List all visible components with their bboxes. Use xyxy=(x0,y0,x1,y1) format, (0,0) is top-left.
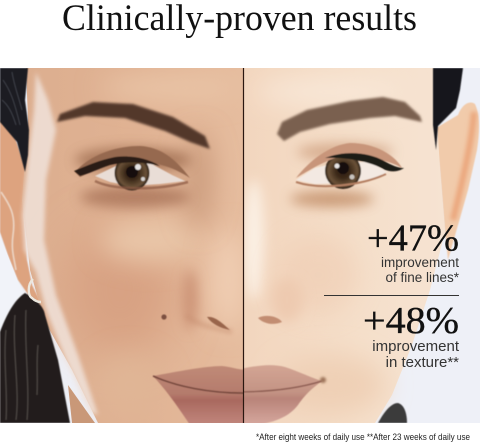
right undereye shadow xyxy=(290,191,374,207)
left undereye shadow xyxy=(80,186,190,208)
value 48: +48% xyxy=(363,300,459,342)
right nostril xyxy=(258,316,282,324)
right eye socket xyxy=(297,143,393,161)
stat: texture xyxy=(363,300,460,371)
earring xyxy=(29,279,41,302)
mole xyxy=(161,314,167,320)
right hair bottom xyxy=(378,403,407,423)
photo background xyxy=(0,68,480,423)
left eye socket xyxy=(75,147,191,173)
label texture: improvement xyxy=(372,338,460,355)
stat: fine lines xyxy=(367,218,460,285)
left lips xyxy=(154,366,243,423)
left face edge highlight xyxy=(22,72,98,415)
right half: after xyxy=(235,68,479,426)
left ear xyxy=(0,120,42,305)
label texture: in texture** xyxy=(386,354,459,371)
right eye xyxy=(296,143,404,189)
left eyebrow xyxy=(57,102,210,149)
left cheek warmth xyxy=(65,225,175,355)
left nose xyxy=(192,320,232,334)
neck xyxy=(68,385,95,423)
left half: before xyxy=(0,68,250,428)
before/after divider line xyxy=(242,68,244,423)
right lips xyxy=(244,364,320,423)
right ear xyxy=(436,102,479,260)
ponytail hair xyxy=(0,293,70,423)
label fine lines: of fine lines* xyxy=(385,270,460,285)
value 47: +47% xyxy=(367,218,459,260)
left background sliver xyxy=(6,250,16,277)
label fine lines: improvement xyxy=(381,255,459,270)
right eyebrow xyxy=(277,97,422,141)
right skin xyxy=(235,68,445,423)
left eye xyxy=(74,146,190,190)
left hair xyxy=(0,68,29,172)
right hair top xyxy=(433,68,463,150)
stat divider xyxy=(324,294,459,296)
left skin xyxy=(22,68,250,423)
